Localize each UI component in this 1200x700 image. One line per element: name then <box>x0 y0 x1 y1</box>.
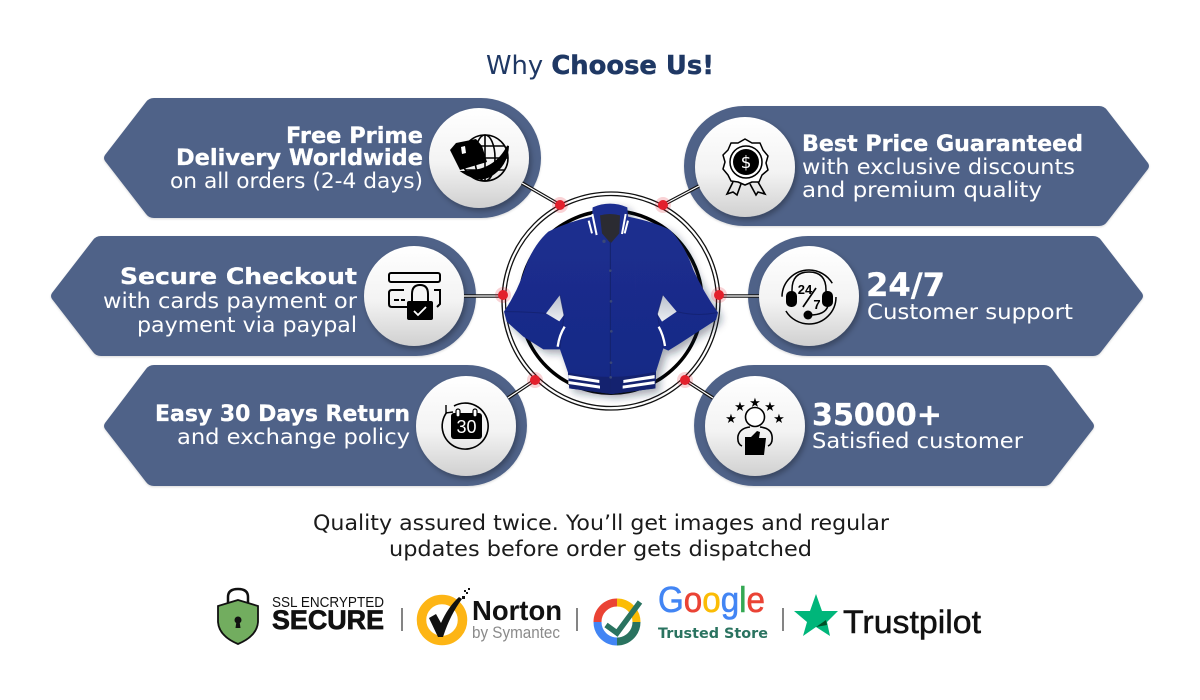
panel: free prime delivery <box>104 98 541 218</box>
text: best price <box>802 132 1083 203</box>
icon: 30 day calendar <box>442 403 488 449</box>
icon: 30 day calendar: 30 <box>456 417 477 437</box>
trust badges <box>218 579 981 644</box>
icon: price medal: $ <box>741 153 751 173</box>
connector lines <box>464 183 759 398</box>
text: best price: Best Price Guaranteed <box>802 132 1083 157</box>
text: free prime delivery: Delivery Worldwide <box>176 146 423 171</box>
icon: 24/7 headset <box>782 270 836 324</box>
quality assurance text <box>313 511 889 561</box>
icon: rated customer <box>725 396 785 455</box>
icon: card and padlock <box>389 273 440 320</box>
arm gaps <box>546 295 564 321</box>
panel: satisfied customers <box>694 365 1094 486</box>
text: easy returns: Easy 30 Days Return <box>155 402 410 427</box>
text: best price: and premium quality <box>802 178 1042 203</box>
red connector dots <box>495 197 727 388</box>
badge: norton <box>422 588 562 642</box>
icon: price medal <box>723 139 768 195</box>
pocket stripes <box>558 327 665 347</box>
icon: 24/7 headset: 7 <box>813 297 821 312</box>
text: free prime delivery <box>170 124 423 194</box>
hem stripes <box>568 375 655 389</box>
quality assurance text: updates before order gets dispatched <box>389 537 812 561</box>
text: secure checkout <box>103 265 358 338</box>
icon: rated customer: ★ <box>734 400 746 415</box>
panel: easy returns <box>104 365 527 486</box>
icon: rated customer: ★ <box>749 396 761 411</box>
badge: ssl secure <box>218 589 384 644</box>
text: secure checkout: payment via paypal <box>137 313 357 338</box>
text: easy returns <box>155 402 410 450</box>
badge: google trusted store: Trusted Store <box>658 626 768 642</box>
icon: 24/7 headset: 24 <box>798 282 813 297</box>
badge: norton: Norton <box>472 595 562 626</box>
badge: google trusted store <box>598 579 768 642</box>
panel: secure checkout <box>51 236 476 356</box>
text: satisfied customers <box>812 398 1023 454</box>
panel: customer support <box>748 236 1143 356</box>
badge: trustpilot: Trustpilot <box>843 604 981 640</box>
icon: rated customer: ★ <box>725 412 737 427</box>
title: Why Choose Us! <box>486 51 714 81</box>
sleeve folds <box>505 295 717 348</box>
text: satisfied customers: 35000+ <box>812 398 942 433</box>
placket and buttons <box>609 242 612 392</box>
badge: google trusted store: Google <box>658 579 765 620</box>
text: customer support <box>866 266 1073 325</box>
badge: ssl secure: SSL ENCRYPTED <box>272 594 384 611</box>
badge: norton: by Symantec <box>472 623 560 642</box>
outer double ring <box>502 192 720 410</box>
icon: rated customer: ★ <box>764 400 776 415</box>
black disc <box>518 209 704 395</box>
text: free prime delivery: Free Prime <box>286 124 423 149</box>
text: satisfied customers: Satisfied customer <box>812 429 1023 454</box>
badge: trustpilot <box>794 594 981 640</box>
text: secure checkout: with cards payment or <box>103 289 357 314</box>
text: best price: with exclusive discounts <box>802 155 1075 180</box>
panel: best price <box>684 106 1149 226</box>
text: customer support: Customer support <box>867 300 1073 325</box>
text: easy returns: and exchange policy <box>177 425 410 450</box>
text: free prime delivery: on all orders (2-4 days) <box>170 169 423 194</box>
central jacket emblem <box>502 192 720 410</box>
icon: rated customer: ★ <box>773 412 785 427</box>
connector highlights <box>464 183 759 398</box>
text: customer support: 24/7 <box>866 266 945 304</box>
quality assurance text: Quality assured twice. You’ll get images and regular <box>313 511 889 535</box>
text: secure checkout: Secure Checkout <box>120 265 358 290</box>
collar lining <box>600 214 620 243</box>
jacket <box>504 204 718 394</box>
badge separators <box>402 608 783 631</box>
collar stripes <box>589 214 628 235</box>
badge: ssl secure: SECURE <box>272 605 384 635</box>
hem band <box>568 372 656 394</box>
icon: globe and parcel <box>450 135 508 181</box>
